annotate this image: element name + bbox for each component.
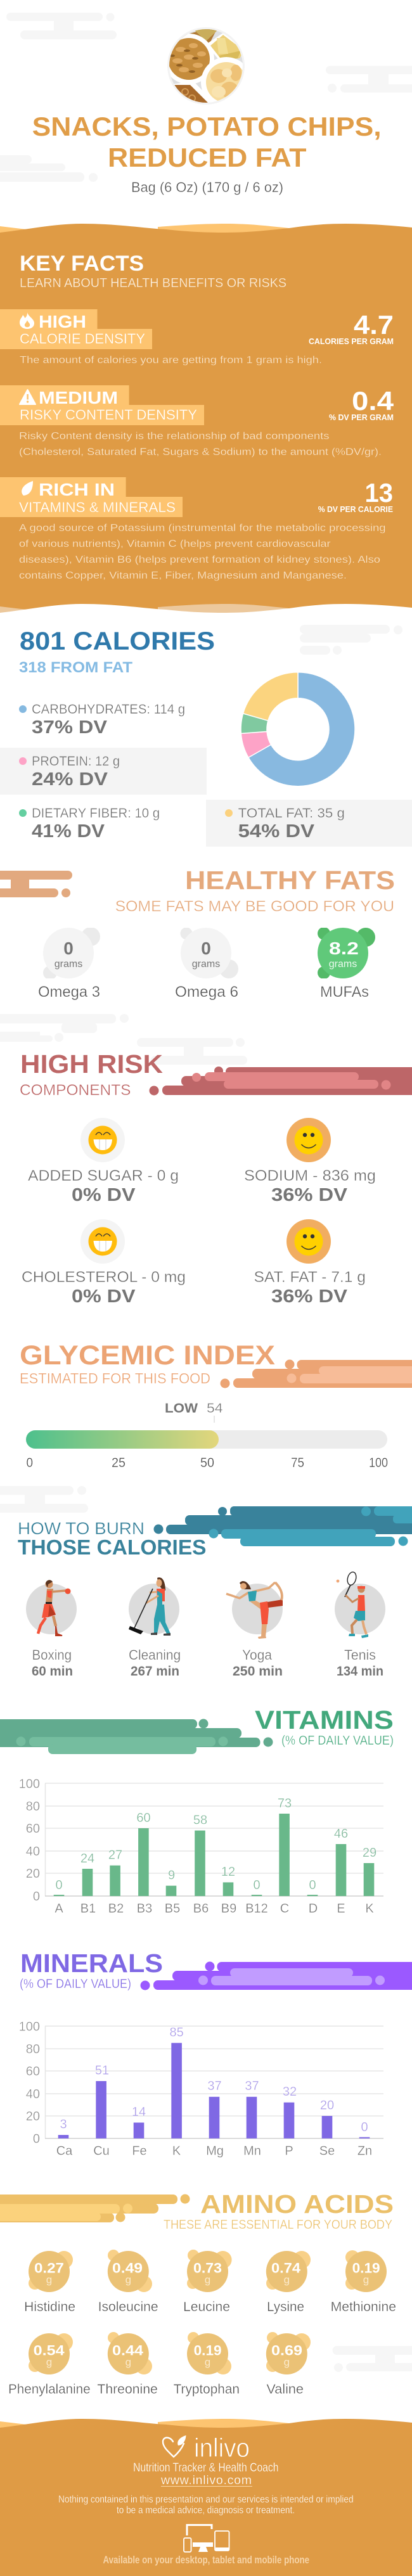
gauge scale: 75 <box>291 1456 304 1470</box>
bar chart: vitamins: B5 <box>165 1902 180 1916</box>
heading: THOSE CALORIES <box>18 1535 207 1559</box>
activity: yoga: 250 min <box>233 1664 283 1679</box>
bar chart: vitamins: K <box>365 1902 374 1916</box>
bar chart: vitamins: 0 <box>55 1878 63 1892</box>
fact: risky content density: (Cholesterol, Saturated Fat, Sugars & Sodium) to the amount (%DV/gr). <box>19 447 382 458</box>
legend: carbohydrates: 37% DV <box>32 717 108 738</box>
chips dish <box>208 33 241 58</box>
bar chart: minerals: 20 <box>320 2099 334 2113</box>
item: phenylalanine: 0.54 <box>34 2343 65 2359</box>
gauge scale: 100 <box>369 1456 388 1470</box>
logo: inlivo <box>194 2433 250 2463</box>
bar chart: vitamins: 0 <box>309 1878 316 1892</box>
item: added sugar: ADDED SUGAR - 0 g <box>28 1167 179 1184</box>
item: sodium <box>244 1118 376 1205</box>
item: sodium: 36% DV <box>271 1185 348 1205</box>
bar chart: minerals: K <box>172 2144 181 2158</box>
disclaimer <box>58 2494 354 2516</box>
activity: yoga: Yoga <box>242 1647 273 1663</box>
panel: amino acids <box>0 2189 396 2397</box>
website: www.inlivo.com <box>160 2473 252 2487</box>
item: tryptophan: Tryptophan <box>174 2382 240 2397</box>
heading <box>18 1519 207 1559</box>
item: omega 3: grams <box>55 959 82 970</box>
item: omega 3 <box>38 927 100 1001</box>
fact: risky content density: RISKY CONTENT DENSITY <box>20 407 197 423</box>
item: omega 6: grams <box>192 959 220 970</box>
bar chart: vitamins: E <box>337 1902 345 1916</box>
item: valine <box>266 2332 311 2397</box>
disclaimer: Nothing contained in this presentation and our services is intended or implied <box>58 2494 354 2505</box>
fact: rich in vitamins and minerals: of various nutrients), Vitamin C (helps prevent cardiovascular <box>19 539 331 549</box>
item: omega 6: 0 <box>201 939 211 958</box>
background cloud: calories <box>300 625 402 655</box>
fact: calorie density: CALORIE DENSITY <box>20 331 145 347</box>
item: lysine: g <box>284 2274 290 2286</box>
top snacks <box>177 29 216 43</box>
bar chart: minerals: Cu <box>93 2144 110 2158</box>
bar chart: vitamins: 73 <box>278 1797 292 1810</box>
item: mufas: MUFAs <box>320 984 369 1001</box>
item: leucine: g <box>205 2274 210 2286</box>
item: methionine: Methionine <box>331 2300 396 2314</box>
bar chart: vitamins: 0 <box>253 1878 261 1892</box>
bar chart: minerals: 60 <box>26 2065 40 2079</box>
icon: devices <box>184 2525 229 2552</box>
item: threonine: 0.44 <box>112 2343 144 2359</box>
item: omega 3: 0 <box>63 939 74 958</box>
fact: rich in vitamins and minerals: contains Copper, Vitamin E, Fiber, Magnesium and Manganese. <box>19 570 347 581</box>
bar chart: minerals: 100 <box>19 2020 40 2034</box>
item: mufas: 8.2 <box>329 939 359 958</box>
bar chart: minerals: Ca <box>56 2144 73 2158</box>
bar chart: vitamins: B6 <box>193 1902 209 1916</box>
item: omega 6 <box>175 928 238 1001</box>
heading: key facts: KEY FACTS <box>20 252 144 276</box>
item: lysine <box>266 2251 311 2314</box>
item: cholesterol <box>22 1219 186 1307</box>
item: added sugar: 0% DV <box>72 1185 136 1205</box>
panel: how to burn calories <box>18 1506 412 1679</box>
item: phenylalanine: g <box>46 2356 52 2368</box>
bar chart: minerals: P <box>285 2144 293 2158</box>
bar chart: minerals: Se <box>319 2144 335 2158</box>
item: isoleucine: g <box>126 2274 131 2286</box>
activity: boxing <box>26 1580 77 1679</box>
heading: healthy fats: HEALTHY FATS <box>185 866 395 895</box>
pretzel dish <box>174 83 210 103</box>
fact: calorie density <box>0 309 394 366</box>
subheading: (% OF DAILY VALUE) <box>20 1977 131 1991</box>
item: tryptophan <box>174 2332 240 2397</box>
icon: leaf <box>22 481 33 496</box>
icon: grinning face <box>80 1118 125 1162</box>
bar chart: minerals: 0 <box>33 2132 40 2146</box>
fact: calorie density: CALORIES PER GRAM <box>309 337 394 346</box>
bar chart: vitamins <box>19 1777 383 1916</box>
item: omega 6: Omega 6 <box>175 984 238 1001</box>
subheading: from fat: 318 FROM FAT <box>19 659 132 676</box>
bar chart: vitamins: 60 <box>136 1811 151 1825</box>
background clouds: high risk <box>0 1014 247 1065</box>
legend: dietary fiber: DIETARY FIBER: 10 g <box>32 806 160 821</box>
bar chart: minerals: 14 <box>132 2105 146 2119</box>
heading: calories: 801 CALORIES <box>20 627 215 655</box>
header decoration <box>150 1067 412 1095</box>
heading: HOW TO BURN <box>18 1519 145 1538</box>
bar chart: minerals: 3 <box>60 2118 67 2132</box>
header decoration <box>0 2194 190 2222</box>
icon: tennis player <box>337 1571 368 1638</box>
marker label: LOW <box>165 1401 198 1416</box>
legend: dietary fiber <box>19 806 160 842</box>
title: REDUCED FAT <box>108 143 307 172</box>
bar chart: vitamins: D <box>309 1902 318 1916</box>
gauge scale <box>27 1456 388 1470</box>
gauge scale: 50 <box>200 1456 214 1470</box>
item: valine: 0.69 <box>271 2343 302 2359</box>
item: threonine: g <box>126 2356 131 2368</box>
title: SNACKS, POTATO CHIPS, <box>32 112 382 141</box>
activity: tennis: 134 min <box>337 1664 383 1679</box>
fact: rich in vitamins and minerals: RICH IN <box>39 480 115 499</box>
icon: smiling face <box>286 1118 331 1162</box>
bar chart: vitamins: 20 <box>26 1867 40 1881</box>
item: histidine: Histidine <box>24 2300 75 2314</box>
donut chart <box>241 672 355 786</box>
subheading: ESTIMATED FOR THIS FOOD <box>20 1370 210 1387</box>
title <box>32 112 382 172</box>
item: tryptophan: g <box>205 2356 210 2368</box>
activity: cleaning: 267 min <box>131 1664 179 1679</box>
bar chart: vitamins: B3 <box>137 1902 152 1916</box>
marker label: 54 <box>207 1401 223 1416</box>
legend: protein: PROTEIN: 12 g <box>32 754 120 769</box>
item: isoleucine <box>98 2250 158 2314</box>
bar chart: vitamins: 27 <box>108 1848 122 1862</box>
bar chart: vitamins: B1 <box>80 1902 96 1916</box>
fact: risky content density: % DV PER GRAM <box>329 413 394 422</box>
subheading: (% OF DAILY VALUE) <box>281 1734 394 1748</box>
item: lysine: Lysine <box>267 2300 304 2314</box>
header decoration <box>221 1360 412 1388</box>
legend: protein: 24% DV <box>32 769 108 790</box>
bar chart: minerals: Zn <box>357 2144 372 2158</box>
activity: tennis <box>335 1571 385 1679</box>
item: threonine <box>97 2332 158 2397</box>
item: saturated fat: SAT. FAT - 7.1 g <box>254 1269 366 1286</box>
bar chart: vitamins: B12 <box>245 1902 268 1916</box>
bar chart: vitamins: 29 <box>363 1846 377 1860</box>
panel: key facts band <box>0 224 412 618</box>
legend: total fat <box>206 800 412 847</box>
activity: tennis: Tenis <box>344 1647 376 1663</box>
bar chart: vitamins: 100 <box>19 1777 40 1791</box>
item: histidine: g <box>46 2274 52 2286</box>
item: isoleucine: 0.49 <box>112 2260 143 2276</box>
heading: amino acids: AMINO ACIDS <box>200 2189 394 2219</box>
item: isoleucine: Isoleucine <box>98 2300 158 2314</box>
bar chart: vitamins: 40 <box>26 1845 40 1859</box>
legend: total fat: TOTAL FAT: 35 g <box>238 806 345 821</box>
bar chart: vitamins: 58 <box>193 1814 207 1828</box>
bar chart: minerals: 40 <box>26 2087 40 2101</box>
header decoration <box>0 871 72 897</box>
bar chart: minerals: 0 <box>361 2120 368 2134</box>
heading: vitamins: VITAMINS <box>255 1705 394 1734</box>
gauge scale: 25 <box>112 1456 126 1470</box>
activity: boxing: Boxing <box>32 1647 72 1663</box>
activity: cleaning: Cleaning <box>129 1647 181 1663</box>
subheading: SOME FATS MAY BE GOOD FOR YOU <box>115 898 394 915</box>
activity: yoga <box>226 1581 283 1679</box>
item: saturated fat: 36% DV <box>271 1286 348 1307</box>
background cloud: amino acids <box>332 2346 412 2372</box>
fact: calorie density: 4.7 <box>354 310 394 340</box>
item: omega 3: Omega 3 <box>38 984 100 1001</box>
bar chart: minerals: Mn <box>243 2144 261 2158</box>
bar chart: minerals: Fe <box>132 2144 147 2158</box>
item: valine: Valine <box>266 2382 304 2397</box>
fact: risky content density: 0.4 <box>352 386 394 416</box>
panel: high risk <box>20 1049 412 1307</box>
fact: risky content density: Risky Content density is the relationship of bad components <box>19 431 330 442</box>
fact: risky content density: MEDIUM <box>39 388 118 407</box>
icon: flame <box>20 312 34 329</box>
item: lysine: 0.74 <box>271 2260 301 2276</box>
icon: warning triangle <box>20 390 35 404</box>
fact: rich in vitamins and minerals: 13 <box>365 478 393 508</box>
serving size: Bag (6 Oz) (170 g / 6 oz) <box>131 179 283 195</box>
tagline: Nutrition Tracker & Health Coach <box>133 2461 279 2475</box>
panel: healthy fats <box>0 866 395 1001</box>
heading: glycemic index: GLYCEMIC INDEX <box>20 1340 275 1371</box>
bar chart: minerals: 80 <box>26 2042 40 2056</box>
header decoration <box>153 1506 412 1546</box>
bar chart: minerals: 85 <box>169 2025 184 2039</box>
heading: minerals: MINERALS <box>20 1949 163 1978</box>
marker label <box>165 1401 223 1423</box>
item: leucine: 0.73 <box>193 2260 222 2276</box>
icon: person in yoga pose <box>226 1581 283 1639</box>
disclaimer: to be a medical advice, diagnosis or treatment. <box>117 2505 295 2516</box>
bar chart: minerals: 37 <box>245 2079 259 2093</box>
item: histidine <box>24 2251 75 2314</box>
background cloud: burn calories <box>0 1486 88 1513</box>
legend: carbohydrates <box>19 702 185 738</box>
panel: footer <box>0 2419 412 2576</box>
legend: total fat: 54% DV <box>238 821 315 842</box>
item: methionine <box>331 2250 396 2314</box>
icon: grinning face <box>80 1219 125 1264</box>
bar chart: vitamins: 9 <box>168 1868 175 1882</box>
gauge bar <box>26 1430 387 1449</box>
bar chart: vitamins: 80 <box>26 1800 40 1814</box>
fact: calorie density: The amount of calories you are getting from 1 gram is high. <box>20 355 322 366</box>
panel: minerals <box>19 1949 412 2158</box>
item: phenylalanine: Phenylalanine <box>8 2382 91 2397</box>
bar chart: vitamins: 0 <box>33 1890 40 1904</box>
panel: calories <box>0 627 412 847</box>
item: methionine: 0.19 <box>352 2260 380 2276</box>
fact: calorie density: HIGH <box>39 312 86 331</box>
item: cholesterol: 0% DV <box>72 1286 136 1307</box>
bar chart: minerals: 20 <box>26 2110 40 2124</box>
legend: protein <box>0 748 207 795</box>
item: mufas: grams <box>329 959 357 970</box>
item: tryptophan: 0.19 <box>194 2343 222 2359</box>
bar chart: vitamins: 60 <box>26 1822 40 1836</box>
fact: rich in vitamins and minerals <box>0 477 393 581</box>
icon: person sweeping <box>129 1577 171 1636</box>
bar chart: minerals: 32 <box>283 2085 297 2099</box>
fact: risky content density <box>0 385 394 458</box>
nut bowl <box>169 34 214 84</box>
header decoration <box>0 1719 273 1754</box>
activity: boxing: 60 min <box>32 1664 73 1679</box>
bar chart: minerals: 51 <box>95 2063 109 2077</box>
bar chart: vitamins: 24 <box>80 1852 94 1866</box>
icon: boxer <box>38 1580 71 1636</box>
subheading: components: COMPONENTS <box>20 1082 131 1099</box>
item: valine: g <box>284 2356 290 2368</box>
item: mufas <box>318 927 375 1001</box>
item: histidine: 0.27 <box>34 2260 64 2276</box>
fact: rich in vitamins and minerals: diseases), Vitamin B6 (helps prevent formation of kidney stones). Also <box>19 554 380 565</box>
item: leucine <box>183 2250 232 2314</box>
bar chart: vitamins: B2 <box>108 1902 124 1916</box>
item: threonine: Threonine <box>97 2382 158 2397</box>
legend: dietary fiber: 41% DV <box>32 821 105 842</box>
item: saturated fat <box>254 1219 366 1307</box>
bar chart: minerals <box>19 2020 383 2158</box>
bar chart: vitamins: 46 <box>334 1827 348 1841</box>
food photo <box>167 27 245 105</box>
header decoration <box>141 1962 412 1990</box>
item: sodium: SODIUM - 836 mg <box>244 1167 376 1184</box>
item: methionine: g <box>363 2274 369 2286</box>
bar chart: minerals: 37 <box>207 2079 222 2093</box>
item: leucine: Leucine <box>183 2300 230 2314</box>
bar chart: vitamins: C <box>280 1902 289 1916</box>
bar chart: vitamins: B9 <box>221 1902 236 1916</box>
item: phenylalanine <box>8 2333 91 2397</box>
panel: glycemic index <box>20 1340 412 1470</box>
icon: smiling face <box>286 1219 331 1264</box>
fact: rich in vitamins and minerals: VITAMINS & MINERALS <box>19 499 176 515</box>
gauge scale: 0 <box>27 1456 33 1470</box>
fact: rich in vitamins and minerals: A good source of Potassium (instrumental for the metabolic processing <box>19 523 386 534</box>
bar chart: vitamins: A <box>55 1902 63 1916</box>
availability note: Available on your desktop, tablet and mobile phone <box>103 2554 309 2566</box>
heading: high risk: HIGH RISK <box>20 1049 163 1079</box>
item: cholesterol: CHOLESTEROL - 0 mg <box>22 1269 186 1286</box>
logo <box>163 2433 250 2463</box>
activity: cleaning <box>129 1577 181 1679</box>
chips bowl <box>201 57 243 102</box>
bar chart: vitamins: 12 <box>221 1865 235 1879</box>
background clouds: header <box>0 13 412 182</box>
panel: vitamins <box>0 1705 394 1916</box>
item: added sugar <box>28 1118 179 1205</box>
subheading: LEARN ABOUT HEALTH BENEFITS OR RISKS <box>20 276 286 290</box>
fact: rich in vitamins and minerals: % DV PER CALORIE <box>318 505 393 514</box>
bar chart: minerals: Mg <box>206 2144 224 2158</box>
legend: carbohydrates: CARBOHYDRATES: 114 g <box>32 702 185 717</box>
